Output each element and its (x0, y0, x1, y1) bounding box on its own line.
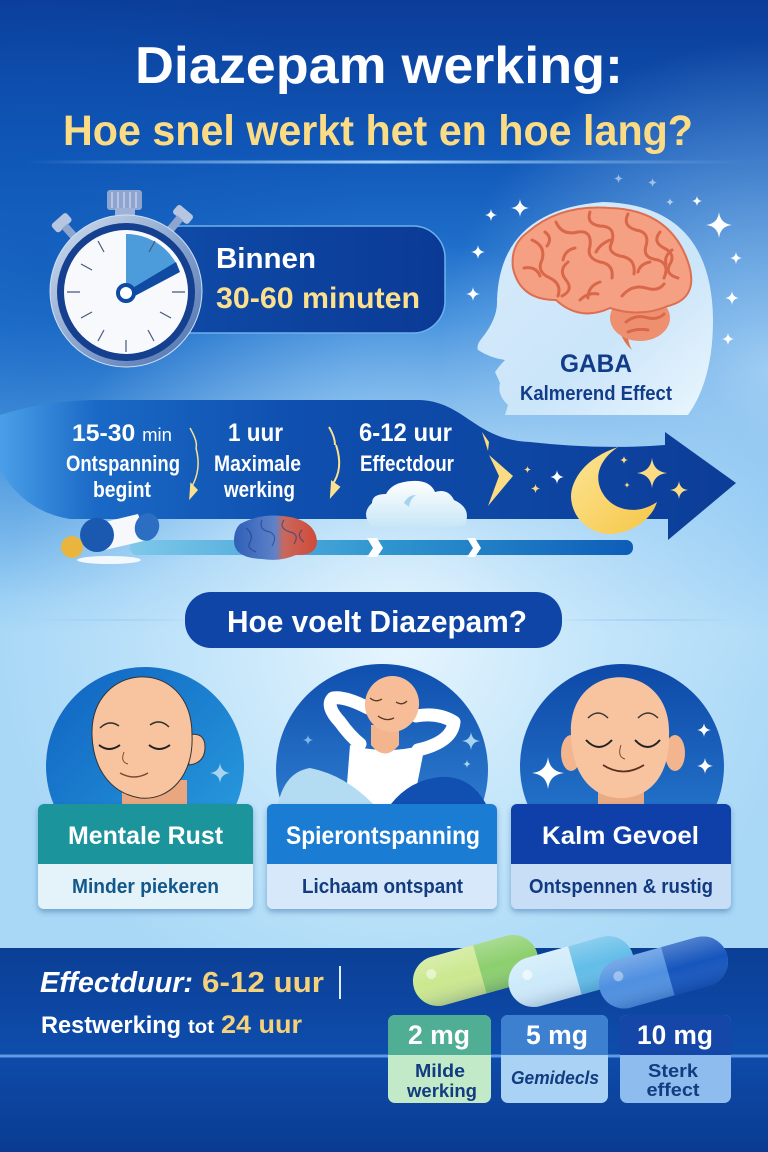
effect duration text (40, 966, 341, 1039)
card: kalm gevoel: Ontspennen & rustig (529, 876, 713, 898)
card: mentale rust: Minder piekeren (72, 876, 219, 898)
card: mentale rust: Mentale Rust (68, 822, 224, 850)
card: spierontspanning: Lichaam ontspant (302, 876, 463, 898)
step: 1 uur: Maximale (214, 451, 301, 476)
dose card: 10 mg: Sterk (648, 1061, 699, 1081)
step: 15-30 min: begint (93, 477, 152, 502)
illustration: calm face side (46, 667, 244, 804)
icon: head with brain: Kalmerend Effect (520, 383, 672, 405)
icon: stopwatch (50, 190, 202, 367)
panel: onset time: 30-60 minuten (216, 282, 420, 315)
icon: small brain (234, 516, 317, 560)
step: 6-12 uur (359, 419, 454, 476)
illustration: calm face front (520, 664, 724, 804)
step: 15-30 min: 15-30 min (72, 420, 172, 447)
icon: moon and stars (524, 447, 688, 534)
arrow: thin chevron 1 (190, 428, 198, 498)
card: kalm gevoel (511, 664, 731, 909)
panel: onset time (150, 226, 445, 333)
illustration: relaxing person (276, 664, 488, 804)
dose card: 5 mg: Gemidecls (511, 1068, 599, 1088)
step: 1 uur: 1 uur (228, 419, 283, 447)
icon: head with brain (466, 174, 742, 415)
card: kalm gevoel: Kalm Gevoel (542, 822, 699, 850)
effect duration text: Restwerking (41, 1012, 181, 1039)
step: 15-30 min: Ontspanning (66, 451, 180, 476)
effect duration text: Effectduur: (40, 967, 193, 999)
step: 6-12 uur: Effectdour (360, 451, 454, 476)
effect duration text: 6-12 uur (202, 967, 324, 999)
step: 6-12 uur: 6-12 uur (359, 419, 452, 447)
section heading: Hoe voelt Diazepam? (227, 604, 527, 639)
title: Hoe snel werkt het en hoe lang? (63, 107, 693, 155)
arrow: thin chevron 2 (329, 427, 339, 496)
card: spierontspanning: Spierontspanning (286, 822, 480, 850)
effect duration text: 24 uur (221, 1011, 302, 1039)
icon: cloud (366, 481, 467, 528)
icon: relaxation object (61, 510, 163, 564)
section heading (30, 592, 735, 648)
icon: head with brain: GABA (560, 350, 632, 378)
progress bar (130, 538, 633, 557)
title (63, 37, 693, 155)
panel: onset time: Binnen (216, 243, 316, 275)
card: spierontspanning (267, 664, 497, 909)
effect duration text: tot (188, 1017, 215, 1038)
dose card: 2 mg: 2 mg (408, 1020, 470, 1050)
capsule: blue (593, 931, 734, 1014)
card: mentale rust (38, 667, 253, 909)
capsule: light blue (503, 930, 639, 1013)
dose card: 2 mg (388, 1015, 491, 1103)
dose card: 10 mg (620, 1015, 731, 1103)
step: 15-30 min (66, 420, 180, 502)
dose card: 2 mg: Milde (415, 1061, 465, 1081)
dose card: 2 mg: werking (406, 1081, 477, 1101)
timeline arrow (0, 400, 736, 540)
step: 1 uur: werking (223, 477, 295, 502)
dose card: 10 mg: effect (646, 1080, 700, 1100)
step: 1 uur (214, 419, 301, 502)
arrow: large chevron (482, 432, 513, 506)
dose card: 5 mg: 5 mg (526, 1020, 588, 1050)
dose card: 5 mg (501, 1015, 608, 1103)
capsule: green (407, 929, 544, 1012)
dose card: 10 mg: 10 mg (637, 1020, 713, 1050)
bottom band (0, 948, 768, 1152)
brain (513, 208, 691, 350)
title: Diazepam werking: (135, 37, 623, 95)
stars around head (466, 174, 742, 345)
